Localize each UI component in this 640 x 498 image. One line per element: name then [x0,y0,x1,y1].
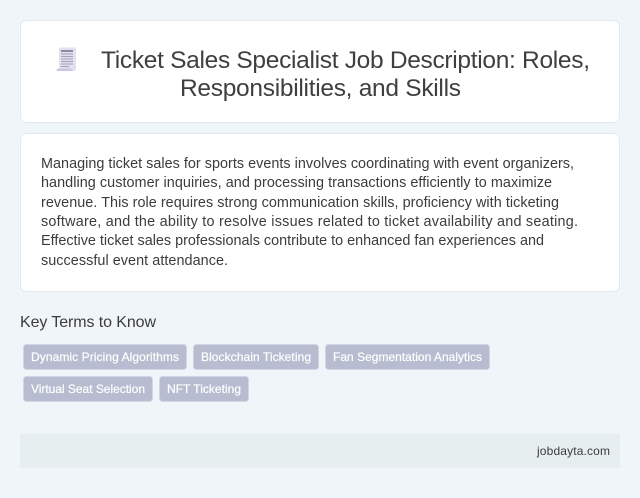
tag: NFT Ticketing: NFT Ticketing [167,382,241,396]
panel: title card [20,20,620,122]
text block: description: revenue. This role requires strong communication skills, proficiency with ticketing [41,195,559,211]
text block: description: software, and the ability to resolve issues related to ticket availability and seating. [41,214,578,230]
heading: title: Ticket Sales Specialist Job Description: Roles, [101,47,590,74]
footer bar: jobdayta.com [536,444,610,458]
heading: key terms: Key Terms to Know [20,314,156,331]
tag: Blockchain Ticketing: Blockchain Ticketing [201,350,311,364]
panel: description card [20,134,620,292]
tag: Virtual Seat Selection [24,376,152,402]
heading: title: Responsibilities, and Skills [180,75,461,102]
tag: Dynamic Pricing Algorithms [24,344,186,370]
text block: description: Managing ticket sales for sports events involves coordinating with event organizers, [41,156,574,172]
heading: title [101,47,590,102]
text block: description: successful event attendance. [41,253,228,269]
footer bar [20,434,620,468]
tag: Fan Segmentation Analytics [326,344,490,370]
text block: description [41,156,578,269]
text block: description: Effective ticket sales professionals contribute to enhanced fan experiences and [41,233,544,249]
tag: Dynamic Pricing Algorithms: Dynamic Pricing Algorithms [31,350,179,364]
text block: description: handling customer inquiries, and processing transactions efficiently to maximize [41,175,552,191]
tag: Virtual Seat Selection: Virtual Seat Selection [31,382,145,396]
tag: Blockchain Ticketing [194,344,318,370]
tag: NFT Ticketing [160,376,248,402]
tag: Fan Segmentation Analytics: Fan Segmentation Analytics [333,350,482,364]
icon: receipt scroll [56,48,76,71]
